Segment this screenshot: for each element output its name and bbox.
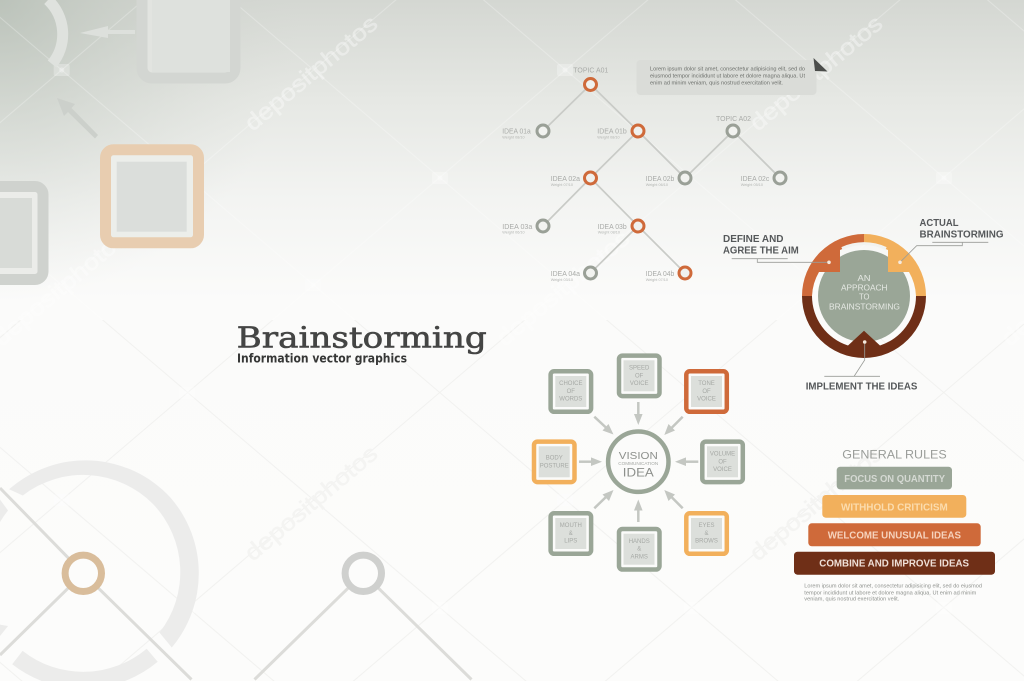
watermarks: depositphotos xyxy=(239,10,382,136)
gray nodes xyxy=(537,125,786,279)
box: hands and arms xyxy=(619,529,660,570)
rule: combine and improve: COMBINE AND IMPROVE IDEAS xyxy=(819,559,969,570)
tree labels: IDEA 03a xyxy=(502,222,533,231)
faded arrow top xyxy=(80,26,135,38)
box: speed of voice: OF xyxy=(635,373,644,379)
decorative faded shapes top left xyxy=(0,0,235,280)
rules caption xyxy=(804,583,982,603)
label: implement: IMPLEMENT THE IDEAS xyxy=(806,381,918,392)
callout text xyxy=(650,67,805,86)
box: hands and arms: HANDS xyxy=(629,539,650,545)
faded square left xyxy=(0,186,43,280)
hub text xyxy=(618,450,658,480)
tree labels: Weight 08/10 xyxy=(502,135,525,139)
title: Brainstorming xyxy=(237,320,487,354)
box: volume of voice xyxy=(702,442,743,482)
tree labels: Weight 07/10 xyxy=(646,278,668,282)
rule: combine and improve xyxy=(794,552,995,575)
box: eyes and brows: EYES xyxy=(698,523,715,529)
box: speed of voice: VOICE xyxy=(630,381,649,387)
rule: welcome unusual ideas: WELCOME UNUSUAL IDEAS xyxy=(828,531,961,542)
box: eyes and brows: & xyxy=(704,531,709,537)
rule: welcome unusual ideas xyxy=(808,523,981,546)
hub text: VISION xyxy=(619,450,658,462)
gap above disc xyxy=(842,244,886,248)
box: volume of voice: VOLUME xyxy=(710,452,735,458)
watermarks: depositphotos xyxy=(491,225,634,351)
box: body posture: POSTURE xyxy=(540,463,569,469)
segment: define xyxy=(802,234,864,296)
callout xyxy=(636,58,828,95)
large ring xyxy=(0,460,199,681)
box: tone of voice xyxy=(686,371,727,412)
center text: TO xyxy=(859,292,870,302)
callout box xyxy=(636,60,816,95)
watermarks: depositphotos xyxy=(239,440,382,566)
watermarks: depositphotos xyxy=(744,10,887,136)
rule: focus on quantity: FOCUS ON QUANTITY xyxy=(844,474,945,485)
decorative faded shapes bottom left xyxy=(0,460,472,681)
hub circle xyxy=(608,432,668,492)
box: body posture: BODY xyxy=(546,456,563,462)
tree labels: TOPIC A02 xyxy=(716,114,751,123)
box: volume of voice: VOICE xyxy=(713,467,732,473)
tree labels: Weight 03/10 xyxy=(551,278,573,282)
subtitle: Information vector graphics xyxy=(237,351,407,365)
tree labels: IDEA 03b xyxy=(598,222,627,231)
center text xyxy=(829,273,900,311)
label: actual: BRAINSTORMING xyxy=(920,229,1004,240)
center disc xyxy=(818,250,910,342)
box: mouth and lips: MOUTH xyxy=(560,523,582,529)
box: eyes and brows xyxy=(686,513,727,554)
box: speed of voice: SPEED xyxy=(629,366,650,372)
tree labels: IDEA 02b xyxy=(646,174,674,183)
rule: withhold criticism: WITHHOLD CRITICISM xyxy=(841,503,948,514)
box: tone of voice: OF xyxy=(702,389,711,395)
hub text: IDEA xyxy=(623,466,654,480)
box: eyes and brows: BROWS xyxy=(695,538,718,544)
faded square top xyxy=(142,0,235,78)
callout text: eiusmod tempor incididunt ut labore et dolore magna aliqua. Ut xyxy=(650,74,805,80)
box: tone of voice: VOICE xyxy=(697,397,716,403)
box: mouth and lips xyxy=(551,513,591,554)
corner fold xyxy=(814,58,828,72)
tree labels: Weight 07/10 xyxy=(551,183,573,187)
tree labels xyxy=(502,66,770,282)
box: body posture xyxy=(534,442,574,482)
center text: AN xyxy=(858,273,870,283)
vision hub diagram xyxy=(534,356,743,570)
tree diagram xyxy=(502,66,786,282)
box: choice of words: OF xyxy=(567,389,575,395)
tree labels: IDEA 04a xyxy=(551,269,581,278)
connector lines xyxy=(0,488,472,680)
rule: withhold criticism xyxy=(822,495,966,518)
label: actual: ACTUAL xyxy=(920,218,958,229)
center text: APPROACH xyxy=(841,282,888,292)
rules caption: veniam, quis nostrud exercitation velit. xyxy=(804,597,900,603)
box: speed of voice xyxy=(619,356,660,396)
general rules xyxy=(794,447,995,603)
box: mouth and lips: LIPS xyxy=(564,538,577,544)
box: hands and arms: ARMS xyxy=(631,554,648,560)
box: mouth and lips: & xyxy=(569,531,573,537)
label: define: DEFINE AND xyxy=(723,234,784,245)
tree labels: IDEA 01a xyxy=(502,126,531,135)
segment: actual xyxy=(864,234,926,296)
label: define: AGREE THE AIM xyxy=(723,245,799,256)
rules heading: GENERAL RULES xyxy=(842,447,947,461)
rule: focus on quantity xyxy=(837,467,952,489)
tree labels: Weight 08/10 xyxy=(598,230,620,234)
tan node xyxy=(65,555,102,592)
rules caption: Lorem ipsum dolor sit amet, consectetur adipisicing elit, sed do eiusmod xyxy=(804,583,982,589)
anchor dots xyxy=(827,260,902,344)
callout text: enim ad minim veniam, quis nostrud exercitation velit. xyxy=(650,80,783,86)
faded orange square xyxy=(106,150,198,243)
tree labels: Weight 06/10 xyxy=(502,230,525,234)
gray node xyxy=(345,555,381,592)
box: tone of voice: TONE xyxy=(698,381,715,387)
label: actual xyxy=(920,218,1004,240)
circular approach diagram xyxy=(723,218,1004,392)
arrows xyxy=(579,402,698,522)
tree labels: Weight 08/10 xyxy=(597,135,620,139)
faded arrow diagonal xyxy=(57,98,98,138)
tree connectors xyxy=(543,84,780,273)
leader lines xyxy=(732,242,988,376)
orange nodes xyxy=(584,78,691,279)
callout text: Lorem ipsum dolor sit amet, consectetur adipisicing elit, sed do xyxy=(650,67,805,73)
center text: BRAINSTORMING xyxy=(829,301,900,311)
ring fragment xyxy=(48,0,63,64)
rules caption: tempor incididunt ut labore et dolore magna aliqua. Ut enim ad minim xyxy=(804,590,977,596)
tree labels: IDEA 04b xyxy=(646,269,674,278)
tree labels: IDEA 01b xyxy=(597,126,627,135)
box: hands and arms: & xyxy=(637,546,641,552)
box: choice of words xyxy=(551,371,591,412)
hub text: COMMUNICATION xyxy=(618,461,658,466)
box: volume of voice: OF xyxy=(718,459,727,465)
tree labels: Weight 05/10 xyxy=(741,183,763,187)
watermarks: depositphotos xyxy=(744,440,887,566)
tree labels: IDEA 02a xyxy=(551,174,581,183)
box: choice of words: CHOICE xyxy=(559,381,582,387)
box: choice of words: WORDS xyxy=(559,397,582,403)
tree labels: TOPIC A01 xyxy=(573,66,608,75)
segment: implement xyxy=(802,296,926,358)
label: define xyxy=(723,234,799,256)
tree labels: Weight 06/10 xyxy=(646,183,668,187)
tree labels: IDEA 02c xyxy=(741,174,770,183)
